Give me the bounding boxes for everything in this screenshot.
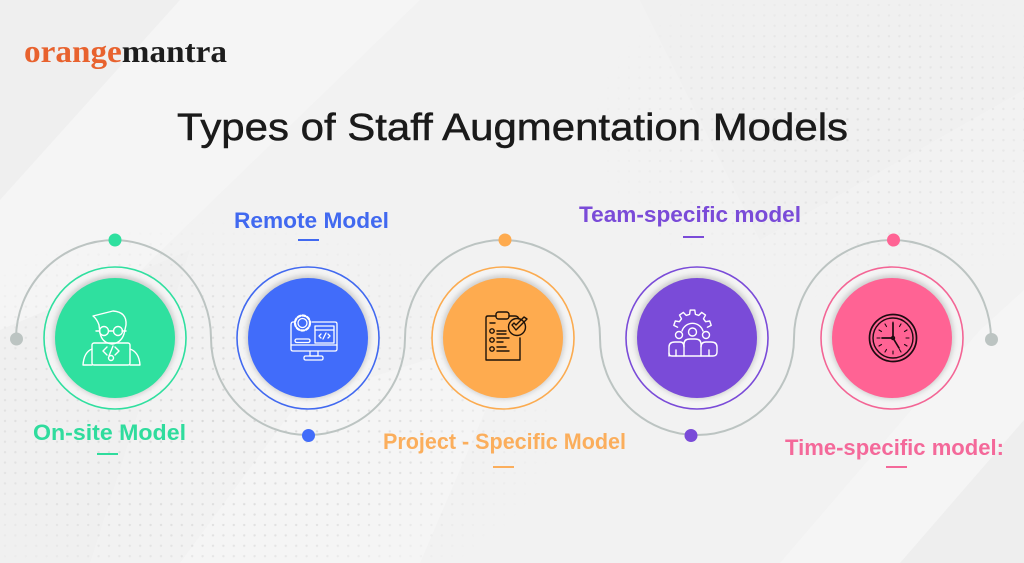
end dot left (10, 332, 23, 346)
ring (44, 267, 186, 409)
icon: checklist clipboard (486, 312, 527, 360)
step 5: time-specific model (821, 234, 963, 409)
icon: desktop with code and gear (291, 316, 337, 360)
ring (821, 267, 963, 409)
label: project-specific model: Project - Specific Model (383, 429, 626, 454)
connector path (16, 240, 991, 435)
end dot right (985, 333, 998, 346)
step 1: on-site model (44, 234, 186, 409)
disc (55, 278, 175, 398)
step 3: project-specific model (432, 234, 574, 409)
disc (248, 278, 368, 398)
disc (443, 278, 563, 398)
disc (832, 278, 952, 398)
icon: developer at laptop (83, 311, 140, 365)
marker dot (498, 234, 512, 246)
icon: wall clock (870, 314, 916, 362)
label: team-specific model: Team-specific model (579, 202, 801, 227)
logo: orangemantra: orangemantra (24, 33, 227, 69)
marker dot (887, 234, 900, 246)
label: on-site model: On-site Model (33, 420, 186, 445)
step 2: remote model (237, 267, 379, 442)
icon: team with gear (669, 310, 717, 356)
marker dot (108, 234, 122, 246)
title: Types of Staff Augmentation Models (177, 107, 848, 149)
ring (626, 267, 768, 409)
ring (432, 267, 574, 409)
disc (637, 278, 757, 398)
marker dot (684, 429, 698, 442)
step 4: team-specific model (626, 267, 768, 442)
label: remote model: Remote Model (234, 208, 389, 233)
label: time-specific model: Time-specific model: (785, 435, 1004, 460)
marker dot (302, 429, 315, 442)
ring (237, 267, 379, 409)
